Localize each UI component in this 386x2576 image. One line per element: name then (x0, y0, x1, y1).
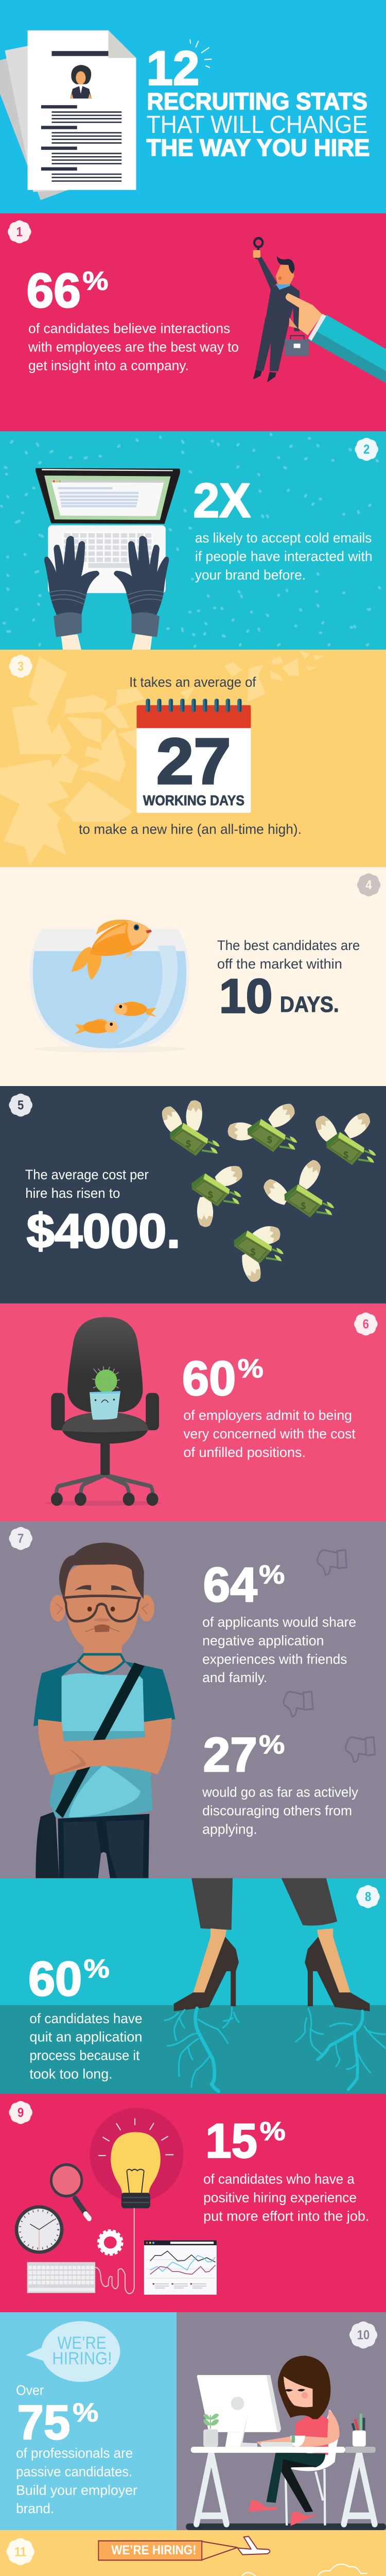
icon: thumbs down (284, 1691, 313, 1717)
text block: as likely to accept cold emails (195, 531, 372, 546)
badge 8: 8 (365, 1890, 371, 1904)
text block: process because it (29, 2048, 139, 2063)
badge 11 (7, 2538, 34, 2565)
badge 6: 6 (363, 1317, 369, 1331)
panel: stat 4 (0, 867, 386, 1086)
panel: stat 2 (0, 431, 386, 650)
illustration: plane with hiring banner: WE’RE HIRING! (111, 2543, 197, 2557)
speech bubble: we're hiring: HIRING! (52, 2348, 112, 2368)
illustration: money with wings 6 (234, 1224, 284, 1285)
chart: line graph window (144, 2240, 217, 2295)
text block: off the market within (217, 957, 342, 972)
text block: brand. (16, 2501, 54, 2517)
text block: 64%: of applicants would share (202, 1615, 356, 1630)
text block: positive hiring experience (203, 2190, 357, 2206)
badge 9 (9, 2101, 32, 2124)
illustration: money with wings 3: $ (343, 1149, 348, 1160)
badge 10 (349, 2321, 377, 2348)
stat 75%: 75 (17, 2396, 70, 2449)
panel: stat 11 (0, 2530, 386, 2576)
icon: calendar 27 working days (136, 699, 251, 813)
text block: Build your employer (16, 2483, 137, 2498)
stat 60%: 60 (28, 1952, 82, 2006)
icon: calendar 27 working days: 27 (156, 725, 231, 798)
panel: stat 5 (0, 1086, 386, 1303)
stat 27%: 27 (203, 1728, 257, 1782)
badge 4: 4 (365, 878, 372, 892)
panel: stat 6 (0, 1303, 386, 1521)
stat 60%: % (238, 1354, 264, 1383)
text block: 64%: experiences with friends (202, 1652, 347, 1667)
title: RECRUITING STATS (147, 89, 367, 115)
text block: of candidates who have a (203, 2172, 355, 2187)
illustration: money with wings 1: $ (186, 1138, 191, 1149)
icon: thumbs down (346, 1737, 375, 1762)
badge 3 (9, 655, 32, 678)
text block: your brand before. (195, 568, 306, 583)
text block: of employers admit to being (183, 1408, 352, 1423)
text block (28, 321, 239, 374)
illustration: money with wings 2 (228, 1099, 297, 1152)
stat 10 days: 10 (219, 969, 273, 1023)
illustration: money with wings 5 (260, 1157, 334, 1217)
illustration: businessman held by giant hand (253, 238, 386, 383)
stat 60% (28, 1952, 110, 2006)
text block: 64%: and family. (202, 1670, 267, 1686)
panel: stat 9 (0, 2094, 386, 2312)
text block (25, 1167, 149, 1201)
text block (203, 2172, 369, 2224)
icon: stack of resume papers (0, 30, 136, 200)
text block: quit an application (29, 2029, 142, 2045)
panel: stat 8 (0, 1878, 386, 2094)
text block: 64% (202, 1615, 356, 1686)
text block: 27%: would go as far as actively (202, 1785, 358, 1800)
panel: header (0, 0, 386, 213)
stat 66%: % (82, 266, 108, 296)
badge 5: 5 (17, 1098, 24, 1112)
text block: 27%: discouraging others from (202, 1803, 352, 1819)
text block (29, 2011, 142, 2082)
stat 15%: % (260, 2117, 286, 2146)
stat 27%: % (259, 1730, 285, 1759)
badge 3: 3 (17, 659, 24, 673)
text block: took too long. (29, 2066, 113, 2082)
text: it takes an average of: It takes an average of (129, 675, 256, 690)
icon: gear (99, 2231, 122, 2254)
illustration: woman working at desk (186, 2355, 386, 2530)
title: THAT WILL CHANGE (147, 111, 367, 139)
icon: clock (15, 2205, 63, 2254)
text block (195, 531, 373, 583)
text block (183, 1408, 356, 1460)
stat 75%: % (73, 2398, 98, 2427)
stat 60%: 60 (182, 1351, 236, 1405)
title: 12 (147, 41, 199, 95)
text block: if people have interacted with (195, 549, 373, 564)
stat 10 days: DAYS. (280, 992, 339, 1016)
illustration: money with wings 4: $ (208, 1189, 213, 1200)
badge 2: 2 (363, 443, 370, 456)
stat 66%: 66 (27, 264, 81, 317)
speech bubble: we're hiring: WE’RE (57, 2333, 107, 2352)
badge 9: 9 (17, 2106, 24, 2120)
text block: The average cost per (25, 1167, 149, 1182)
panel: stat 10 (0, 2312, 386, 2530)
text block: of unfilled positions. (183, 1445, 306, 1460)
title (147, 40, 370, 161)
illustration: empty office chair with sad cactus (45, 1317, 161, 1506)
text block: of professionals are (16, 2446, 133, 2461)
text block: 64%: negative application (202, 1633, 324, 1649)
text block: of candidates believe interactions (28, 321, 230, 336)
stat 10 days (219, 969, 339, 1023)
stat $4000: $4000. (27, 1204, 181, 1258)
badge 2 (355, 438, 378, 461)
icon: calendar 27 working days: WORKING DAYS (143, 792, 244, 809)
decoration: clouds (236, 2564, 367, 2576)
stat 64% (203, 1558, 285, 1612)
text block (16, 2446, 137, 2517)
badge 1 (8, 221, 31, 243)
illustration: unhappy man with bag (33, 1543, 176, 1878)
stat 15% (205, 2114, 286, 2168)
icon: goldfish bowl (29, 920, 189, 1053)
speech bubble: we're hiring (26, 2321, 120, 2382)
stat 15%: 15 (205, 2114, 257, 2168)
badge 8 (356, 1885, 380, 1908)
illustration: money with wings 5: $ (301, 1200, 306, 1211)
text block: put more effort into the job. (203, 2209, 369, 2224)
text block: of candidates have (29, 2011, 142, 2026)
text block: 27% (202, 1785, 358, 1837)
icon: magnifying glass (51, 2165, 89, 2218)
title: THE WAY YOU HIRE (147, 135, 370, 161)
panel: stat 7 (0, 1521, 386, 1878)
illustration: money with wings 4 (191, 1162, 245, 1228)
icon: thumbs down (318, 1550, 346, 1575)
text block: The best candidates are (217, 938, 360, 953)
illustration: money with wings 1 (158, 1100, 220, 1156)
badge 7: 7 (17, 1531, 24, 1546)
text block: very concerned with the cost (183, 1427, 356, 1442)
stat 27% (203, 1728, 285, 1782)
text block: 27%: applying. (202, 1822, 257, 1837)
stat 64%: 64 (203, 1558, 257, 1612)
text block: hire has risen to (25, 1186, 120, 1201)
badge 6 (354, 1312, 378, 1335)
badge 5 (9, 1094, 32, 1116)
illustration: light bulb (90, 2108, 183, 2208)
text block: get insight into a company. (28, 358, 189, 374)
icon: cable connecting keyboard to bulb (95, 2208, 134, 2294)
text block (217, 938, 360, 972)
badge 4 (357, 873, 380, 896)
illustration: money with wings 3 (311, 1109, 376, 1165)
stat 60% (182, 1351, 264, 1405)
illustration: money with wings 6: $ (251, 1246, 256, 1258)
text: to make a new hire: to make a new hire (an all-time high). (79, 822, 302, 837)
badge 11: 11 (14, 2545, 26, 2559)
stat 64%: % (259, 1560, 285, 1589)
text block: passive candidates. (16, 2464, 132, 2480)
stat 2X: 2X (193, 473, 251, 527)
stat 60%: % (84, 1954, 110, 1984)
stat 66% (27, 264, 108, 317)
text block: with employees are the best way to (28, 340, 239, 355)
icon: laptop with gloved hands (36, 468, 180, 650)
badge 10: 10 (357, 2328, 370, 2342)
badge 7 (9, 1527, 32, 1550)
text: over: Over (16, 2383, 44, 2398)
panel: stat 3 (0, 650, 386, 867)
illustration: legs in heels rooted to the ground (165, 1878, 386, 2091)
illustration: plane with hiring banner (98, 2536, 270, 2560)
badge 1: 1 (16, 225, 23, 239)
icon: keyboard (27, 2262, 95, 2293)
illustration: money with wings 2: $ (267, 1133, 272, 1145)
stat 75% (17, 2396, 98, 2449)
panel: stat 1 (0, 213, 386, 431)
